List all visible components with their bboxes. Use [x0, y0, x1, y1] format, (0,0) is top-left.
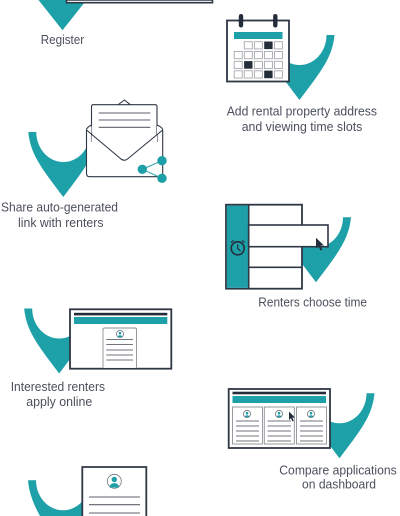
step: compare applications	[229, 389, 397, 492]
label: register: Register	[41, 33, 84, 47]
label: compare applications: on dashboard	[302, 478, 376, 492]
label: share link: link with renters	[18, 216, 104, 230]
icon: renter profile card	[82, 467, 146, 516]
teal pin: final profile	[28, 480, 98, 516]
step: apply online	[11, 308, 171, 409]
teal pin: compare	[304, 393, 374, 458]
teal pin: calendar step	[264, 35, 334, 100]
label: apply online: Interested renters	[11, 380, 105, 394]
label: add rental property: Add rental property address	[227, 105, 377, 119]
label: compare applications	[279, 463, 397, 492]
icon: calendar	[227, 14, 289, 82]
label: add rental property: and viewing time slots	[242, 120, 362, 134]
icon: application web page	[70, 309, 171, 369]
icon: time slot table	[226, 205, 328, 289]
label: compare applications: Compare applications	[279, 463, 397, 477]
step: register	[38, 0, 212, 47]
step: share link	[1, 100, 167, 230]
icon: applications dashboard	[229, 389, 330, 448]
step: add rental property	[227, 14, 377, 134]
icon: registration form	[66, 0, 212, 3]
label: add rental property	[227, 105, 377, 134]
icon: envelope with share nodes	[86, 100, 167, 183]
step: renters choose time	[226, 205, 367, 310]
teal pin: share step	[28, 132, 98, 197]
label: share link	[1, 200, 118, 230]
teal pin: register	[38, 0, 86, 30]
label: apply online	[11, 380, 105, 409]
label: renters choose time: Renters choose time	[258, 296, 367, 310]
teal pin: apply online	[24, 308, 94, 374]
step: final profile	[28, 467, 146, 516]
label: apply online: apply online	[26, 395, 92, 409]
label: share link: Share auto-generated	[1, 200, 118, 214]
teal pin: choose time	[281, 217, 351, 282]
